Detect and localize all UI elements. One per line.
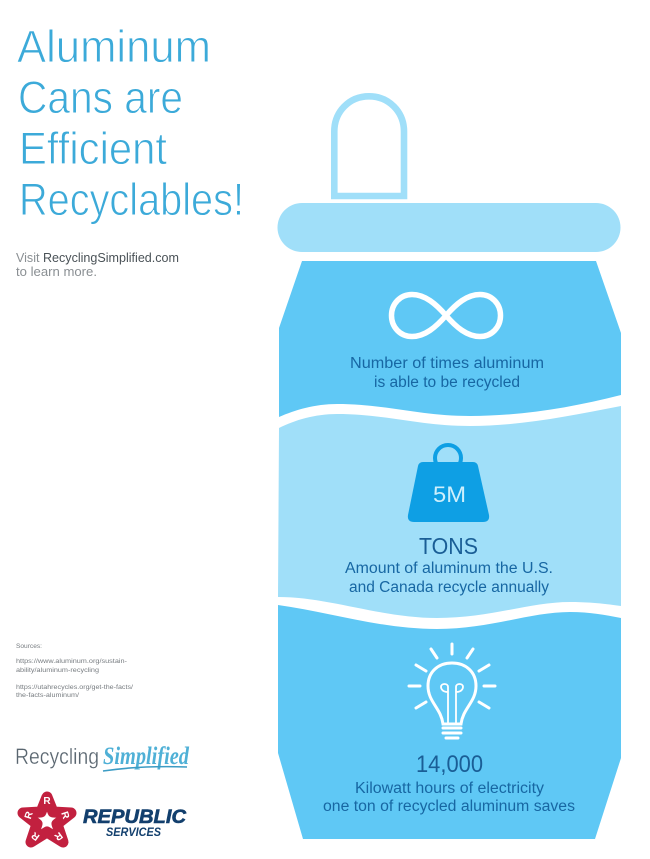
text: tons recycled: and Canada recycle annually <box>349 579 549 596</box>
icon: weight: 5M <box>433 482 466 507</box>
text: electricity saved <box>323 751 575 815</box>
text: tons recycled: Amount of aluminum the U.S. <box>345 560 553 577</box>
visit text block: Visit RecyclingSimplified.com <box>16 250 179 265</box>
title: Cans are <box>18 72 183 123</box>
sources text block: ability/aluminum-recycling <box>16 667 99 674</box>
logo: Recycling Simplified: Recycling <box>15 744 99 769</box>
icon: red star: R <box>23 810 36 821</box>
visit text block <box>16 250 179 279</box>
panel: tons recycled <box>278 406 621 618</box>
icon: red star: R <box>51 829 64 843</box>
title <box>17 21 244 225</box>
text: tons recycled <box>345 533 553 596</box>
sources text block: https://www.aluminum.org/sustain- <box>16 658 127 665</box>
can pull tab <box>334 96 404 196</box>
logo: Republic Services: REPUBLIC <box>83 807 186 828</box>
text: electricity saved: 14,000 <box>416 751 483 778</box>
panel: recycling times <box>279 261 621 417</box>
text: recycling times: is able to be recycled <box>374 374 520 391</box>
sources text block: https://utahrecycles.org/get-the-facts/ <box>16 684 133 691</box>
logo: Republic Services: SERVICES <box>106 827 161 839</box>
can <box>278 96 621 839</box>
icon: red star: R <box>29 829 42 842</box>
logo: Recycling Simplified: Simplified <box>103 743 189 770</box>
icon: red star: R <box>43 796 51 807</box>
title: Efficient <box>19 123 167 174</box>
sources text block: the-facts-aluminum/ <box>16 692 79 699</box>
panel: electricity saved <box>278 605 621 839</box>
logo: Republic Services <box>23 796 186 843</box>
text: recycling times <box>350 355 544 391</box>
text: tons recycled: TONS <box>419 533 478 559</box>
can lid <box>278 203 620 252</box>
sources text block: Sources: <box>16 643 42 650</box>
text: electricity saved: Kilowatt hours of electricity <box>355 780 544 797</box>
text: recycling times: Number of times aluminum <box>350 355 544 372</box>
logo: Recycling Simplified <box>15 743 189 771</box>
icon: weight <box>408 445 489 522</box>
icon: red star: R <box>58 810 71 821</box>
icon: infinity <box>392 294 500 336</box>
sources text block <box>16 643 133 699</box>
icon: light bulb <box>409 644 495 738</box>
icon: red star <box>23 796 71 843</box>
visit text block: to learn more. <box>16 264 97 279</box>
title: Recyclables! <box>19 174 244 225</box>
text: electricity saved: one ton of recycled aluminum saves <box>323 798 575 815</box>
title: Aluminum <box>17 21 211 72</box>
